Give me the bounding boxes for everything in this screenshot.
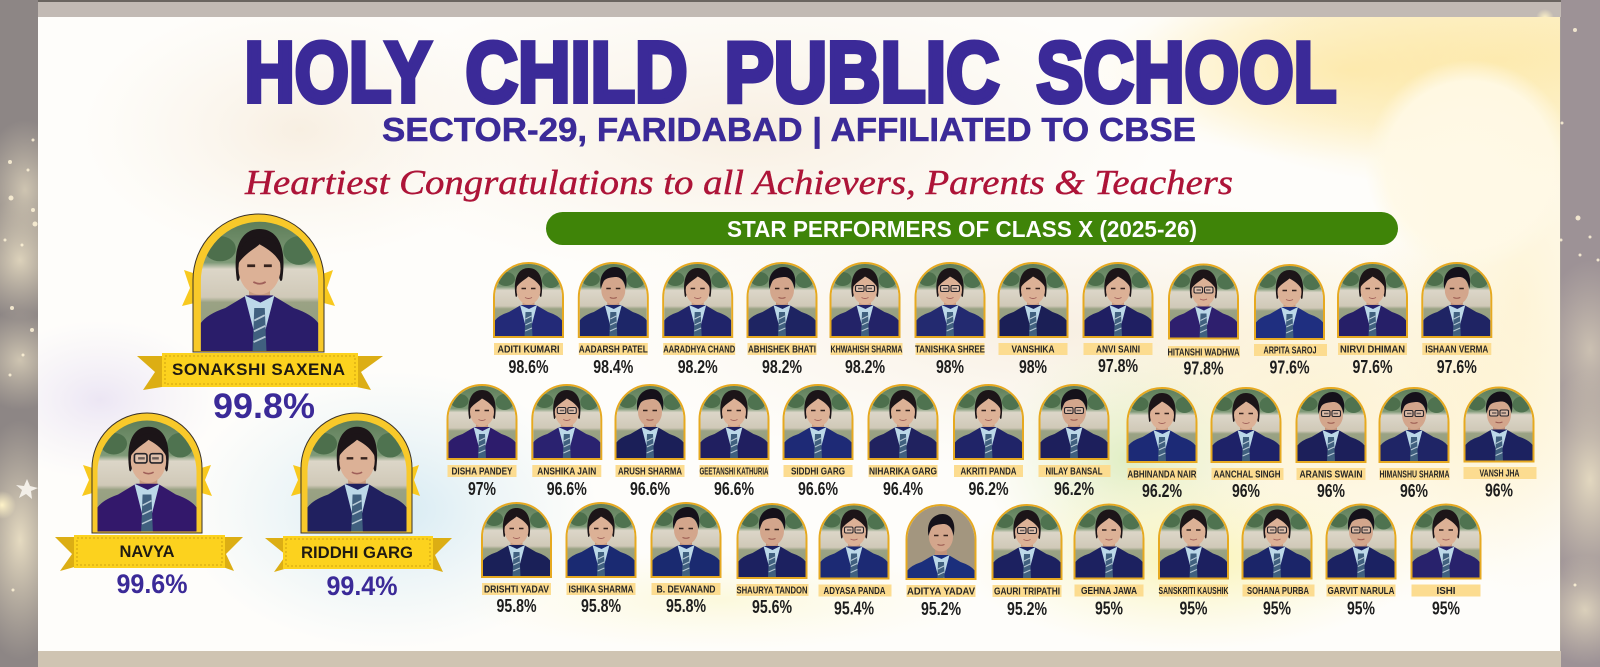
topper: Navya 99.6%: NAVYA bbox=[120, 542, 174, 561]
title: CHILD bbox=[466, 26, 688, 120]
student: Disha Pandey: 97% bbox=[468, 479, 496, 499]
student: Anvi Saini: ANVI SAINI bbox=[1096, 344, 1140, 356]
student: Niharika Garg bbox=[868, 385, 938, 499]
student: Hitanshi Wadhwa: 97.8% bbox=[1184, 358, 1224, 378]
student: Siddhi Garg: 96.6% bbox=[798, 479, 838, 499]
subtitle: SECTOR-29, FARIDABAD | AFFILIATED TO CBSE bbox=[382, 111, 1196, 148]
student: Gauri Tripathi bbox=[992, 505, 1062, 619]
student: Khwahish Sharma bbox=[830, 263, 903, 377]
topper: Sonakshi Saxena 99.8%: SONAKSHI SAXENA bbox=[172, 360, 345, 379]
topper: Riddhi Garg 99.4%: RIDDHI GARG bbox=[301, 543, 413, 562]
student: Arush Sharma: ARUSH SHARMA bbox=[618, 466, 682, 478]
title: SCHOOL bbox=[1036, 26, 1336, 120]
student: Nirvi Dhiman: 97.6% bbox=[1352, 357, 1392, 377]
student: Tanishka Shree: 98% bbox=[936, 357, 964, 377]
student: Abhishek Bhati: ABHISHEK BHATI bbox=[748, 344, 816, 356]
student: Anshika Jain: 96.6% bbox=[547, 479, 587, 499]
student: Aanchal Singh: 96% bbox=[1232, 481, 1260, 501]
student: Geetanshi Kathuria: GEETANSHI KATHURIA bbox=[700, 466, 769, 478]
student: Disha Pandey: DISHA PANDEY bbox=[452, 466, 512, 478]
student: Himanshu Sharma: HIMANSHU SHARMA bbox=[1380, 469, 1450, 481]
student: Gehna Jawa bbox=[1074, 504, 1144, 618]
student: Vanshika bbox=[998, 263, 1068, 377]
student: Arush Sharma: 96.6% bbox=[630, 479, 670, 499]
student: Ishi: ISHI bbox=[1436, 585, 1456, 597]
title: PUBLIC bbox=[724, 26, 1000, 120]
student: Abhinanda Nair: 96.2% bbox=[1142, 481, 1182, 501]
student: Himanshu Sharma bbox=[1380, 388, 1450, 501]
student: Sohana Purba bbox=[1242, 504, 1314, 618]
student: Anshika Jain bbox=[532, 385, 601, 499]
student: Geetanshi Kathuria bbox=[700, 385, 769, 499]
student: Aanchal Singh bbox=[1212, 388, 1284, 501]
student: Arush Sharma bbox=[616, 385, 684, 499]
student: Abhinanda Nair: ABHINANDA NAIR bbox=[1128, 469, 1197, 481]
student: Vansh Jha: 96% bbox=[1485, 480, 1513, 500]
row 2 of performers bbox=[448, 385, 1536, 501]
student: Vanshika: 98% bbox=[1019, 357, 1047, 377]
student: Nirvi Dhiman bbox=[1338, 263, 1407, 377]
student: Himanshu Sharma: 96% bbox=[1400, 481, 1428, 501]
student: Geetanshi Kathuria: 96.6% bbox=[714, 479, 754, 499]
title bbox=[244, 26, 1336, 120]
student: Anvi Saini bbox=[1084, 263, 1152, 376]
student: Anvi Saini: 97.8% bbox=[1098, 356, 1138, 376]
student: B. Devanand bbox=[652, 503, 720, 616]
student: Vanshika: VANSHIKA bbox=[1012, 344, 1055, 356]
student: Drishti Yadav bbox=[482, 503, 551, 616]
student: Disha Pandey bbox=[448, 385, 516, 499]
topper: Riddhi Garg 99.4% bbox=[265, 413, 452, 601]
student: Akriti Panda: 96.2% bbox=[968, 479, 1008, 499]
student: Siddhi Garg: SIDDHI GARG bbox=[791, 466, 845, 478]
student: Hitanshi Wadhwa bbox=[1168, 264, 1240, 378]
student: Sohana Purba: 95% bbox=[1263, 598, 1291, 618]
student: Adyasa Panda: ADYASA PANDA bbox=[824, 585, 886, 597]
student: Arpita Saroj: 97.6% bbox=[1270, 358, 1310, 378]
student: Niharika Garg: 96.4% bbox=[883, 479, 923, 499]
topper: Sonakshi Saxena 99.8%: 99.8% bbox=[213, 387, 315, 426]
student: Adyasa Panda bbox=[818, 504, 892, 618]
heading bar: star performers: STAR PERFORMERS OF CLASS X (2025-26) bbox=[727, 216, 1197, 242]
student: Arpita Saroj bbox=[1254, 265, 1327, 378]
student: Ishaan Verma: 97.6% bbox=[1437, 357, 1477, 377]
student: Aadarsh Patel: 98.4% bbox=[593, 357, 633, 377]
student: Aranis Swain: ARANIS SWAIN bbox=[1300, 469, 1362, 481]
student: Ishaan Verma: ISHAAN VERMA bbox=[1425, 344, 1489, 356]
student: Ishika Sharma: 95.8% bbox=[581, 596, 621, 616]
student: Aditi Kumari: 98.6% bbox=[508, 357, 548, 377]
student: Nilay Bansal: NILAY BANSAL bbox=[1046, 466, 1103, 478]
student: Aaradhya Chand bbox=[663, 263, 736, 377]
student: Ishi: 95% bbox=[1432, 598, 1460, 618]
student: Sanskriti Kaushik bbox=[1158, 504, 1229, 618]
student: Khwahish Sharma: KHWAHISH SHARMA bbox=[830, 344, 903, 356]
student: Shaurya Tandon: SHAURYA TANDON bbox=[736, 585, 808, 597]
student: Ishika Sharma: ISHIKA SHARMA bbox=[568, 584, 634, 596]
student: Vansh Jha: VANSH JHA bbox=[1480, 468, 1520, 480]
topper: Navya 99.6%: 99.6% bbox=[116, 569, 188, 599]
topper: Navya 99.6% bbox=[55, 413, 243, 599]
student: Sohana Purba: SOHANA PURBA bbox=[1247, 585, 1309, 597]
student: Anshika Jain: ANSHIKA JAIN bbox=[537, 466, 596, 478]
student: Shaurya Tandon: 95.6% bbox=[752, 597, 792, 617]
student: Adyasa Panda: 95.4% bbox=[834, 598, 874, 618]
topper: Riddhi Garg 99.4%: 99.4% bbox=[326, 571, 398, 601]
student: Nilay Bansal bbox=[1038, 385, 1110, 499]
student: Aranis Swain bbox=[1296, 388, 1366, 501]
heading bar: star performers bbox=[546, 212, 1398, 245]
student: Aranis Swain: 96% bbox=[1317, 481, 1345, 501]
student: Drishti Yadav: 95.8% bbox=[496, 596, 536, 616]
student: Drishti Yadav: DRISHTI YADAV bbox=[484, 584, 549, 596]
student: Aditya Yadav: 95.2% bbox=[921, 599, 961, 619]
student: Gehna Jawa: 95% bbox=[1095, 598, 1123, 618]
student: Aanchal Singh: AANCHAL SINGH bbox=[1214, 469, 1280, 481]
student: Siddhi Garg bbox=[784, 385, 852, 499]
student: Tanishka Shree bbox=[915, 263, 985, 377]
student: Aditi Kumari: ADITI KUMARI bbox=[498, 344, 560, 356]
student: B. Devanand: 95.8% bbox=[666, 596, 706, 616]
student: Aadarsh Patel bbox=[579, 263, 648, 377]
student: Sanskriti Kaushik: 95% bbox=[1180, 598, 1208, 618]
student: Niharika Garg: NIHARIKA GARG bbox=[869, 466, 937, 478]
student: Abhishek Bhati: 98.2% bbox=[762, 357, 802, 377]
student: Gehna Jawa: GEHNA JAWA bbox=[1081, 585, 1137, 597]
student: Khwahish Sharma: 98.2% bbox=[845, 357, 885, 377]
congratulations line: Heartiest Congratulations to all Achievers, Parents & Teachers bbox=[244, 163, 1233, 202]
student: Aditya Yadav: ADITYA YADAV bbox=[907, 586, 975, 598]
student: Ishaan Verma bbox=[1422, 263, 1491, 377]
student: Aditya Yadav bbox=[906, 505, 976, 619]
row 3 of performers bbox=[482, 503, 1480, 619]
student: Garvit Narula: GARVIT NARULA bbox=[1328, 585, 1395, 597]
student: Hitanshi Wadhwa: HITANSHI WADHWA bbox=[1168, 346, 1240, 358]
student: Abhishek Bhati bbox=[748, 263, 816, 377]
student: Garvit Narula: 95% bbox=[1347, 598, 1375, 618]
student: Aadarsh Patel: AADARSH PATEL bbox=[579, 344, 648, 356]
student: Nilay Bansal: 96.2% bbox=[1054, 479, 1094, 499]
student: Aditi Kumari bbox=[494, 263, 563, 377]
student: Vansh Jha bbox=[1464, 388, 1536, 500]
student: Gauri Tripathi: GAURI TRIPATHI bbox=[994, 586, 1060, 598]
student: Nirvi Dhiman: NIRVI DHIMAN bbox=[1340, 344, 1405, 356]
student: Tanishka Shree: TANISHKA SHREE bbox=[915, 344, 985, 356]
student: Akriti Panda: AKRITI PANDA bbox=[960, 466, 1017, 478]
row 1 of performers bbox=[494, 263, 1491, 378]
student: Aaradhya Chand: AARADHYA CHAND bbox=[663, 344, 736, 356]
student: Ishi bbox=[1412, 504, 1480, 618]
student: Shaurya Tandon bbox=[736, 504, 808, 617]
student: Sanskriti Kaushik: SANSKRITI KAUSHIK bbox=[1158, 585, 1229, 597]
student: Arpita Saroj: ARPITA SAROJ bbox=[1264, 345, 1317, 357]
student: Gauri Tripathi: 95.2% bbox=[1007, 599, 1047, 619]
student: Ishika Sharma bbox=[566, 503, 636, 616]
topper: Sonakshi Saxena 99.8% bbox=[137, 214, 383, 426]
student: B. Devanand: B. DEVANAND bbox=[656, 584, 716, 596]
title: HOLY bbox=[244, 26, 432, 120]
student: Abhinanda Nair bbox=[1128, 388, 1197, 501]
student: Akriti Panda bbox=[954, 385, 1023, 499]
student: Garvit Narula bbox=[1326, 504, 1396, 618]
student: Aaradhya Chand: 98.2% bbox=[678, 357, 718, 377]
